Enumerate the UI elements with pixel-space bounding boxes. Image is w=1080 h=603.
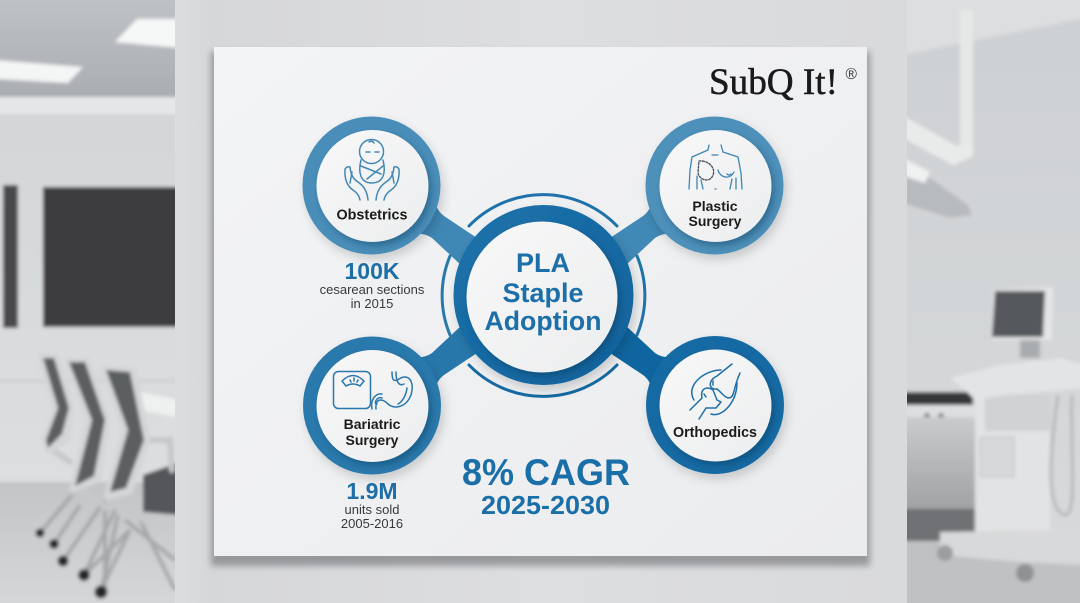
background photo: conference room: [0, 0, 180, 603]
connector: orthopedics to center: [607, 325, 679, 391]
wall: [175, 0, 907, 603]
logo: SubQ It!: [709, 62, 838, 103]
stat: 1.9M: units sold: [345, 502, 399, 517]
label: obstetrics: Obstetrics: [336, 208, 408, 224]
background photo: operating room: [903, 0, 1080, 603]
label: bariatric surgery: Bariatric: [344, 416, 401, 432]
CAGR callout: [462, 452, 630, 520]
connector: obstetrics to center: [408, 200, 480, 266]
label: bariatric surgery: [344, 416, 401, 448]
stat: 1.9M: 2005-2016: [341, 516, 403, 531]
node: obstetrics: [302, 116, 440, 254]
logo: ®: [846, 66, 858, 83]
center title: PLA: [516, 248, 570, 278]
orbit arcs: [442, 195, 645, 396]
node: bariatric surgery: [303, 336, 441, 474]
CAGR callout: 8% CAGR: [462, 452, 630, 493]
node: orthopedics: [646, 336, 784, 474]
center hub: [442, 195, 645, 396]
connector: plastic surgery to center: [607, 200, 679, 266]
label: plastic surgery: Surgery: [689, 213, 742, 229]
connector: bariatric to center: [408, 325, 480, 391]
stat: 100K: cesarean sections: [320, 282, 425, 297]
center title: Adoption: [484, 306, 602, 336]
stat: 100K: in 2015: [351, 296, 393, 311]
center title: Staple: [502, 278, 584, 308]
CAGR callout: 2025-2030: [481, 490, 610, 520]
stat: 100K: [320, 258, 425, 311]
stat: 1.9M: [341, 478, 403, 531]
icon: torso: [689, 145, 742, 189]
white panel: [214, 47, 867, 556]
label: plastic surgery: Plastic: [692, 198, 738, 214]
icon: scale and stomach: [334, 372, 412, 409]
label: plastic surgery: [689, 198, 742, 229]
panel shadow: [211, 52, 870, 566]
icon: baby in hands: [345, 140, 399, 200]
icon: knee joint: [690, 364, 740, 419]
node: plastic surgery: [646, 116, 784, 254]
stat: 100K: 100K: [345, 258, 400, 284]
center title: [484, 248, 602, 336]
stat: 1.9M: 1.9M: [346, 478, 398, 504]
label: bariatric surgery: Surgery: [346, 432, 399, 448]
label: orthopedics: Orthopedics: [673, 424, 757, 441]
